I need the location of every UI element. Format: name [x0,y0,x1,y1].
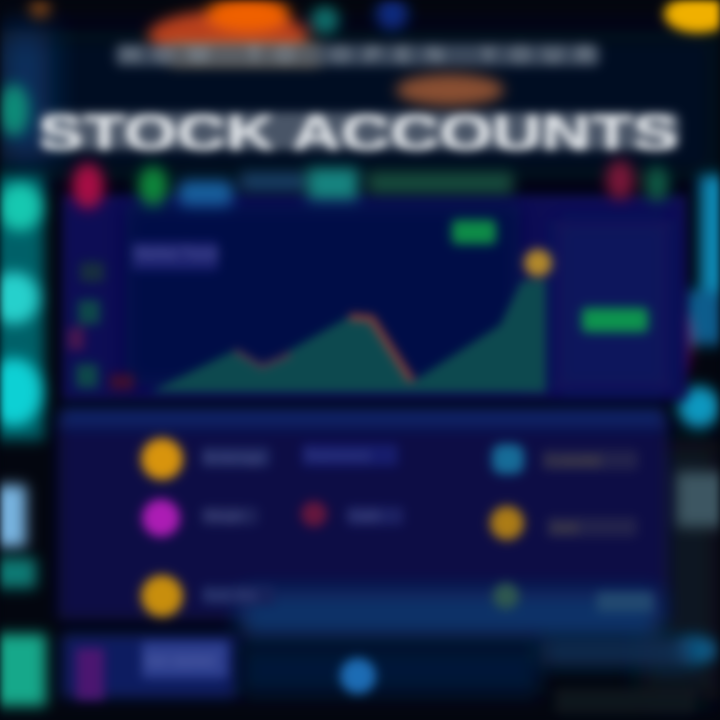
text: account 5: Cash [349,508,379,523]
title: STOCK ACCOUNTS [38,105,678,161]
text: account 2 [302,444,398,466]
icon: chart peak marker [524,249,552,277]
text: account 5 [347,507,403,525]
panel: chart [62,160,687,400]
label: green chip right [582,308,648,332]
text: account 2: Retirement [306,448,370,463]
icon: olive badge [493,583,519,609]
text: account 7 [202,585,274,605]
axis labels [68,262,134,390]
text: account 3: Custodial [546,453,600,468]
top sunburst decoration [30,0,408,64]
icon: gold coin 1 [141,438,183,480]
footer bar [62,634,695,714]
text: account 4: Margin [204,508,244,523]
icon: blue footer dot [340,658,376,694]
text: account 8 [597,592,653,612]
text: account 6 [547,517,637,537]
text: account 4 [202,507,258,525]
panel: left teal strip [0,84,46,706]
panel: account list [58,408,668,640]
subtitle: HOW TO OPEN YOUR [123,42,593,67]
icon: red badge [301,501,327,527]
chart heading text [132,242,218,270]
label: green chip top [452,220,496,244]
chart legend chips [72,160,669,209]
icon: purple footer badge [76,648,104,700]
text: account 7: Roth IRA [204,588,257,603]
chart heading text: Market Trend [135,245,217,261]
footer text [142,642,228,678]
text: account 1: Brokerage [204,450,264,465]
text: account 6: Joint [550,520,578,535]
icon: magenta coin [142,499,180,537]
icon: yellow sun corner [664,0,720,33]
title decoration: orange arc [396,74,504,106]
text: account 3 [542,450,638,470]
area chart [150,280,546,392]
panel: right cyan strip [670,175,720,664]
icon: gold coin 2 [490,506,524,540]
icon: blue badge [492,444,524,474]
icon: gold coin 3 [141,575,183,617]
footer text: Get started [145,652,214,668]
text: account 1 [202,447,270,467]
